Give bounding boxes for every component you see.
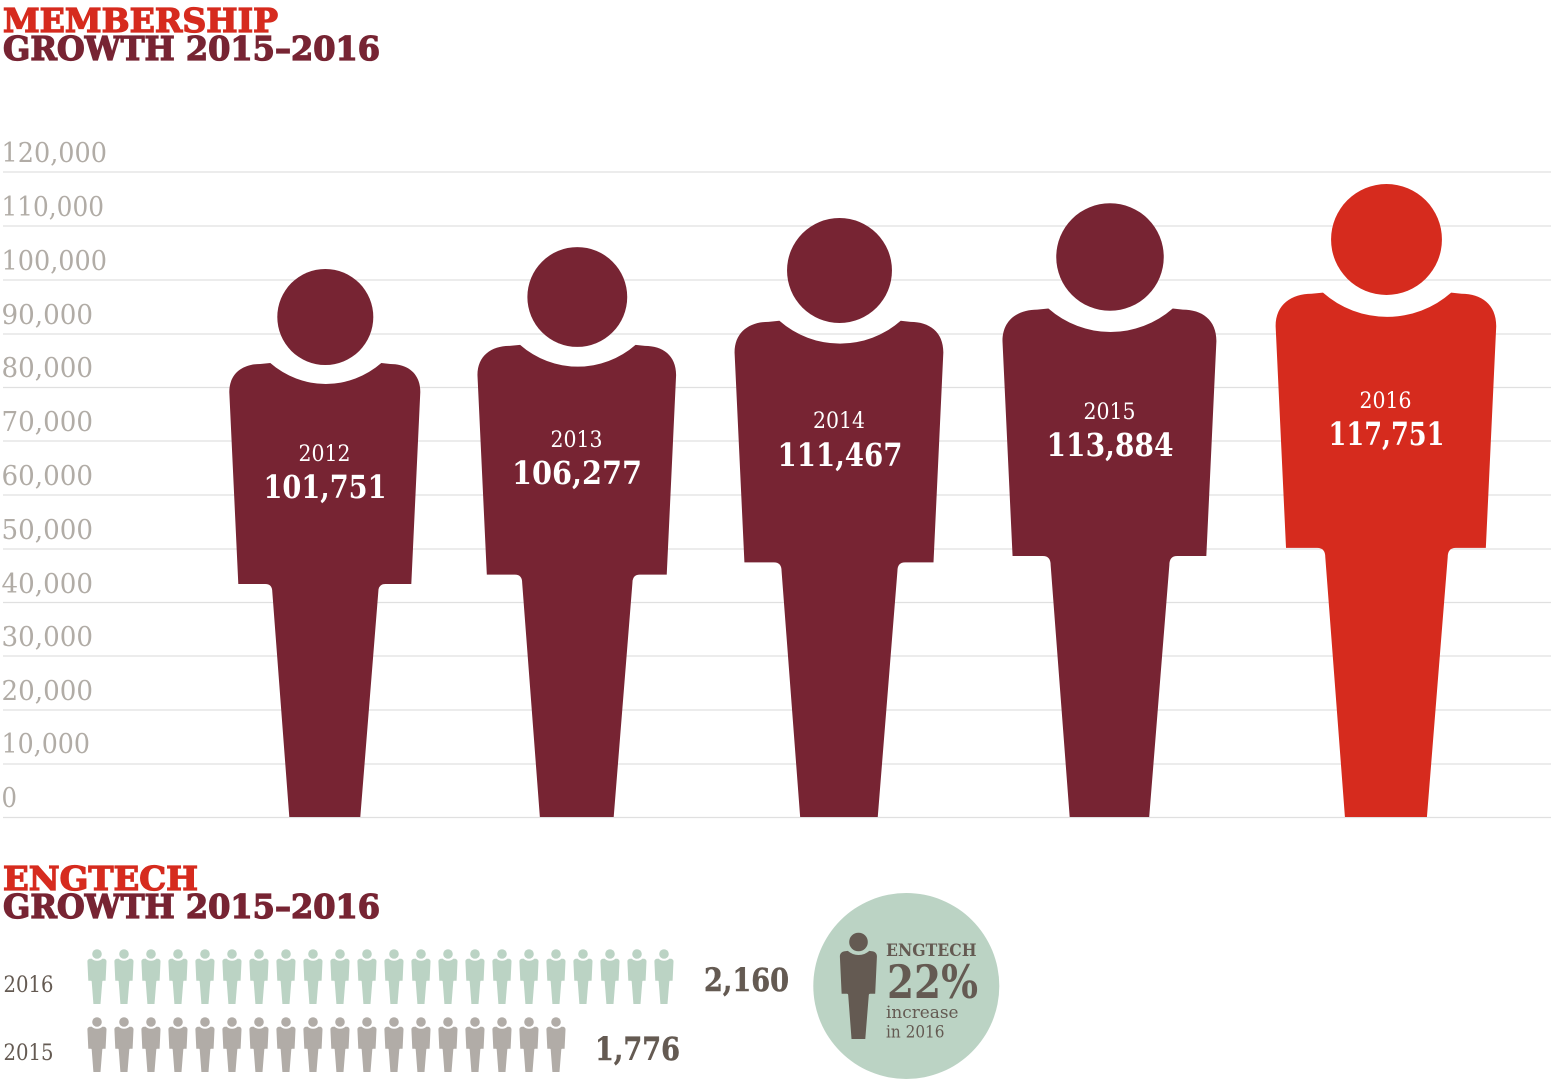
y axis labels: 50,000 [2, 515, 93, 546]
callout: engtech 22% increase: 22% [887, 955, 978, 1009]
y axis labels: 100,000 [2, 246, 107, 277]
y axis labels: 40,000 [2, 569, 93, 600]
title: membership growth [3, 1, 380, 68]
y axis labels: 60,000 [2, 461, 93, 492]
row: 2015 engtech pictogram: 2015 [4, 1041, 54, 1066]
figure: 2016 membership: 117,751 [1328, 415, 1444, 453]
y axis labels: 80,000 [2, 353, 93, 384]
y axis labels: 30,000 [2, 622, 93, 653]
figure: 2013 membership [477, 247, 676, 817]
figure: 2015 membership: 2015 [1084, 400, 1136, 425]
row: 2016 engtech pictogram: 2016 [4, 973, 54, 998]
row: 2016 engtech pictogram [4, 949, 789, 1004]
y axis labels: 120,000 [2, 138, 107, 169]
row: 2015 engtech pictogram [4, 1017, 680, 1072]
callout: engtech 22% increase: increase [886, 1003, 958, 1023]
figure: 2012 membership: 101,751 [264, 468, 386, 506]
figure: 2014 membership: 2014 [813, 409, 865, 434]
figure: 2014 membership [735, 218, 943, 817]
row: 2015 engtech pictogram: 1,776 [595, 1030, 680, 1068]
figure: 2012 membership: 2012 [298, 442, 350, 467]
title: membership growth: MEMBERSHIP [3, 1, 278, 40]
title: engtech growth: GROWTH 2015–2016 [3, 887, 380, 926]
callout: engtech 22% increase [813, 893, 999, 1079]
callout: engtech 22% increase: ENGTECH [886, 941, 976, 961]
figure: 2013 membership: 106,277 [512, 454, 642, 492]
y axis labels: 0 [2, 783, 17, 814]
y axis labels: 10,000 [2, 729, 90, 760]
title: engtech growth [3, 859, 380, 926]
y axis labels: 20,000 [2, 676, 93, 707]
figure: 2015 membership [1002, 203, 1216, 817]
title: membership growth: GROWTH 2015–2016 [3, 29, 380, 68]
title: engtech growth: ENGTECH [3, 859, 198, 898]
callout: engtech 22% increase: in 2016 [886, 1022, 944, 1042]
y axis labels: 70,000 [2, 407, 93, 438]
figure: 2014 membership: 111,467 [778, 436, 902, 474]
y axis labels [2, 138, 107, 814]
y axis labels: 110,000 [2, 192, 104, 223]
figure: 2016 membership [1276, 184, 1496, 817]
y axis labels: 90,000 [2, 300, 93, 331]
figure: 2015 membership: 113,884 [1046, 426, 1174, 464]
row: 2016 engtech pictogram: 2,160 [704, 961, 789, 999]
figure: 2012 membership [229, 269, 420, 817]
figure: 2016 membership: 2016 [1360, 389, 1412, 414]
figure: 2013 membership: 2013 [550, 428, 602, 453]
